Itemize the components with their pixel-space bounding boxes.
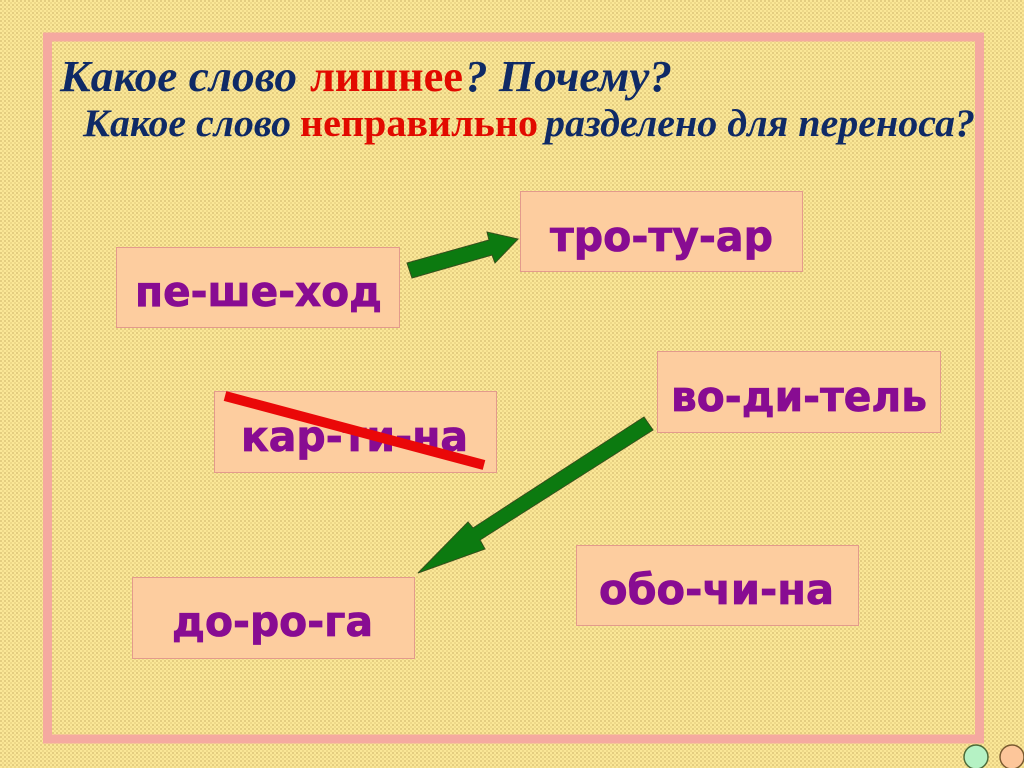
subtitle: second question: Какое слово: [82, 102, 291, 145]
subtitle: second question: разделено для переноса?: [542, 102, 975, 145]
word card: до-ро-га: [132, 578, 414, 658]
title: main question: Какое слово: [59, 52, 297, 101]
word card: тро-ту-ар: [520, 192, 802, 272]
word card: обо-чи-на: обо-чи-на: [599, 565, 834, 614]
word card: тро-ту-ар: тро-ту-ар: [550, 212, 773, 261]
title: main question: лишнее: [310, 52, 463, 101]
icon: green navigation button: [964, 745, 988, 768]
subtitle: second question: [82, 102, 975, 145]
word card: до-ро-га: до-ро-га: [172, 597, 373, 646]
arrow: водитель to дорога: [418, 417, 653, 573]
strike-through line: [225, 396, 484, 465]
word card: кар-ти-на: кар-ти-на: [241, 412, 468, 461]
arrow: пешеход to тротуар: [407, 232, 518, 278]
subtitle: second question: неправильно: [300, 102, 538, 145]
word card: во-ди-тель: во-ди-тель: [671, 372, 927, 421]
title: main question: [59, 52, 672, 101]
word card: пе-ше-ход: пе-ше-ход: [135, 267, 382, 316]
word card: обо-чи-на: [576, 546, 858, 626]
title: main question: ? Почему?: [465, 52, 672, 101]
word card: кар-ти-на: [214, 392, 496, 472]
word card: во-ди-тель: [658, 352, 940, 432]
word card: пе-ше-ход: [116, 248, 400, 328]
icon: orange navigation button: [1000, 745, 1024, 768]
